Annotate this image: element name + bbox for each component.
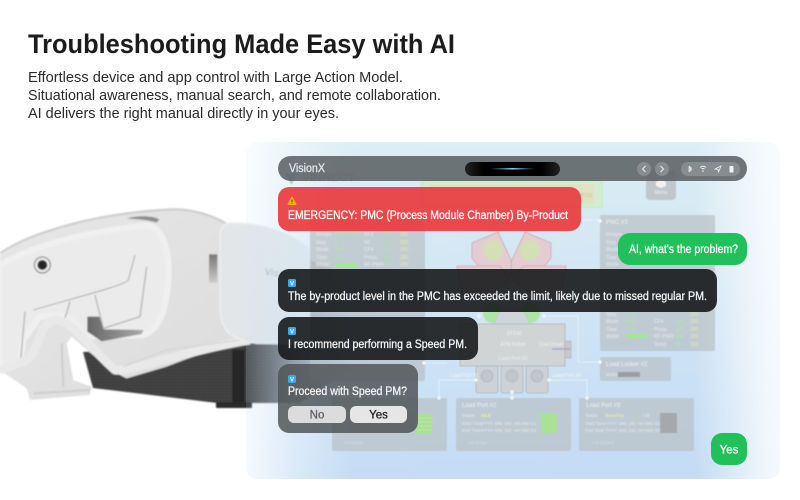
icon: V badge (288, 279, 296, 288)
EFEM unit: ATM Robot (501, 342, 526, 348)
panel: PMC left: 1 / 5 (335, 255, 345, 261)
subtitle text block: AI delivers the right manual directly in your eyes. (28, 106, 339, 122)
panel: Load Port #2: IDLE (481, 413, 491, 418)
panel: PMC left: Mode (316, 247, 329, 253)
panel: Load Port #2: / 25 (544, 413, 552, 418)
panel: PMC #3: Time (606, 327, 617, 333)
process chamber petals (457, 232, 566, 295)
panel: Load Port #1: Lot Detail (344, 440, 363, 445)
panel: PMC #3: Press. (654, 327, 668, 333)
button: Yes: Yes (369, 410, 388, 422)
panel: AR view (246, 142, 780, 479)
panel: Load Locker #2: Wafer (606, 372, 618, 377)
dashboard logo: VINNECT (302, 172, 355, 184)
headset slot (209, 254, 217, 283)
panel: PMC left: 100 (384, 255, 393, 261)
panel: PMC left: Recipe (316, 232, 332, 238)
panel: Load Port #2: YYYY. MM. DD. HH:MM:SS (481, 421, 536, 426)
panel: PMC #3: Auto (625, 319, 636, 325)
message: AI recommendation (278, 317, 478, 360)
headset illustration (0, 209, 378, 408)
panel: PMC #3: Wafer (606, 262, 619, 268)
panel: Load Port #1 (332, 398, 447, 451)
top green status box: MESS (578, 193, 593, 199)
EFEM unit (460, 310, 571, 366)
panel: PMC #3: 60 (675, 342, 681, 348)
panel: PMC left: 280 (400, 247, 409, 253)
message: emergency alert (278, 187, 581, 231)
subtitle text block: Situational awareness, manual search, and remote collaboration. (28, 88, 441, 104)
subtitle text block: Effortless device and app control with Large Action Model. (28, 70, 403, 86)
headset top clip (127, 216, 159, 223)
panel: Load Port #3: End Time (585, 428, 605, 433)
panel: PMC #3: 280 (690, 342, 699, 348)
panel: Load Port #3: YYYY. MM. DD. HH:MM:SS (605, 421, 660, 426)
load port units (476, 366, 548, 393)
icon: V badge: V (290, 378, 294, 384)
panel: PMC #3: 280 (690, 312, 699, 318)
panel: Load Port #3: 10 (634, 413, 640, 418)
EFEM unit: Load Port #2 (499, 356, 528, 362)
back button (637, 162, 651, 176)
panel: PMC #3: Wafer (606, 334, 619, 340)
panel: PMC #3 (600, 215, 715, 351)
panel: Load Locker #2: Load Locker #2 (606, 362, 648, 368)
panel: Load Port #2: YYYY. MM. DD. HH:MM:SS (481, 428, 536, 433)
panel: Load Port #2: Start Time (462, 421, 483, 426)
panel: PMC left: Wafer (316, 262, 329, 268)
icon: V badge: V (290, 282, 294, 288)
panel: Load Port #3: Status (585, 413, 599, 418)
top system bar (278, 156, 747, 181)
panel: PMC left: 600 (384, 262, 393, 268)
message: user question: AI, what's the problem? (629, 244, 738, 256)
panel: Load Port #2: Load Port #2 (462, 403, 497, 409)
headset nose seal (0, 320, 250, 370)
message: user reply Yes: Yes (720, 444, 739, 456)
panel: PMC left: Step (316, 240, 327, 246)
panel: Load Port #3: Start Time (585, 421, 606, 426)
panel: PMC left: 100 (384, 247, 393, 253)
panel: PMC left: Time (316, 255, 327, 261)
panel: PMC #3: Time (606, 255, 617, 261)
button: No: No (310, 410, 324, 422)
panel: PMC left: Auto (335, 247, 346, 253)
message: AI diagnosis: The by-product level in the PMC has exceeded the limit, likely due to missed regular PM. (288, 291, 707, 303)
title: Troubleshooting Made Easy with AI (28, 29, 455, 59)
panel: Load Port #2: Status (462, 413, 476, 418)
menu button (646, 170, 676, 200)
icon: V badge: V (290, 330, 294, 336)
equipment diagram (450, 232, 581, 393)
panel: PMC left: Press. (364, 255, 378, 261)
forward button (655, 162, 669, 176)
panel: PMC #3: 280 (690, 334, 699, 340)
menu button: Menu (655, 190, 667, 196)
load port labels: Load Port #1 (450, 373, 479, 379)
message: confirmation prompt (278, 364, 418, 433)
panel: PMC #3: 1 / 5 (625, 327, 635, 333)
subtitle text block (28, 70, 441, 122)
panel: Load Port #3: Stand by (605, 413, 624, 418)
panel: PMC #3: CF4 (654, 319, 664, 325)
load port labels: Load Port #3 (552, 373, 581, 379)
panel: PMC left: 280 (400, 240, 409, 246)
panel: PMC #3: PMC #3 (606, 220, 628, 226)
headset strap (83, 260, 378, 408)
panel: Load Port #3 (579, 398, 694, 451)
panel: PMC #3: Step (606, 240, 617, 246)
panel: Load Port #2: End Time (462, 428, 482, 433)
panel: Load Port #3: / 25 (642, 413, 650, 418)
message: user question (618, 233, 747, 265)
panel: PMC left: NF3 (364, 232, 374, 238)
EFEM unit: Cool Down (539, 342, 563, 348)
panel: PMC left: N2 (364, 240, 371, 246)
panel: PMC #3: Temp (654, 342, 666, 348)
panel: PMC left: RF PWR (364, 262, 384, 268)
panel: PMC #3: Mode (606, 247, 619, 253)
panel: PMC left: 280 (400, 262, 409, 268)
connector dots (422, 219, 602, 400)
panel: PMC #3: 100 (675, 319, 684, 325)
panel: Load Port #3: Lot Control (592, 440, 614, 445)
panel: PMC left: 100 (384, 232, 393, 238)
headset side module (220, 223, 310, 344)
panel: PMC #3: Recipe (606, 232, 622, 238)
dynamic island (465, 162, 560, 176)
message: emergency alert: EMERGENCY: PMC (Process Module Chamber) By-Product (288, 210, 569, 222)
connector lines (424, 220, 600, 398)
icon: V badge (288, 327, 296, 336)
panel: PMC #3: 600 (675, 334, 684, 340)
panel: PMC left: 2 / 5 (335, 240, 345, 246)
headset lens (0, 225, 169, 370)
panel: Load Port #2: 15 (534, 413, 540, 418)
panel: PMC #3: Mode (606, 319, 619, 325)
panel: Load Port #2 (456, 398, 571, 451)
panel: PMC left: 100 (384, 240, 393, 246)
panel: PMC left: 280 (400, 232, 409, 238)
panel: PMC left: 280 (400, 255, 409, 261)
top green status box (422, 181, 602, 207)
panel: PMC #3: 280 (690, 327, 699, 333)
panel: Load Port #3: YYYY. MM. DD. HH:MM:SS (605, 428, 660, 433)
panel: PMC #3: 2 / 5 (625, 312, 635, 318)
headset body (0, 209, 253, 400)
panel: PMC #3: Step (606, 312, 617, 318)
dashboard logo (285, 172, 355, 185)
message: user reply Yes (711, 433, 747, 465)
load port labels (450, 373, 581, 379)
panel: PMC left (310, 214, 425, 381)
EFEM unit: EFEM (507, 331, 521, 337)
message: confirmation prompt: Proceed with Speed PM? (288, 386, 407, 398)
message: AI recommendation: I recommend performing a Speed PM. (288, 339, 467, 351)
panel: PMC left: B-001-0000 (334, 232, 360, 238)
panel: Load Port #3: Load Port #3 (586, 403, 621, 409)
panel: PMC #3: 100 (675, 327, 684, 333)
panel: PMC #3: 280 (690, 319, 699, 325)
message: AI diagnosis (278, 269, 717, 312)
headset camera (34, 257, 50, 273)
panel: PMC left: CF4 (364, 247, 374, 253)
panel: PMC #3: RF PWR (654, 334, 674, 340)
dashboard background (285, 170, 715, 451)
chamber wafers (483, 240, 540, 323)
panel: Load Locker #2 (600, 357, 671, 381)
bar brand: VisionX (289, 163, 325, 175)
headset module brand: VisionX (264, 267, 302, 282)
panel: Load Port #2: Lot Detail (468, 440, 487, 445)
icon: warning (288, 197, 296, 204)
status icons (681, 162, 740, 176)
